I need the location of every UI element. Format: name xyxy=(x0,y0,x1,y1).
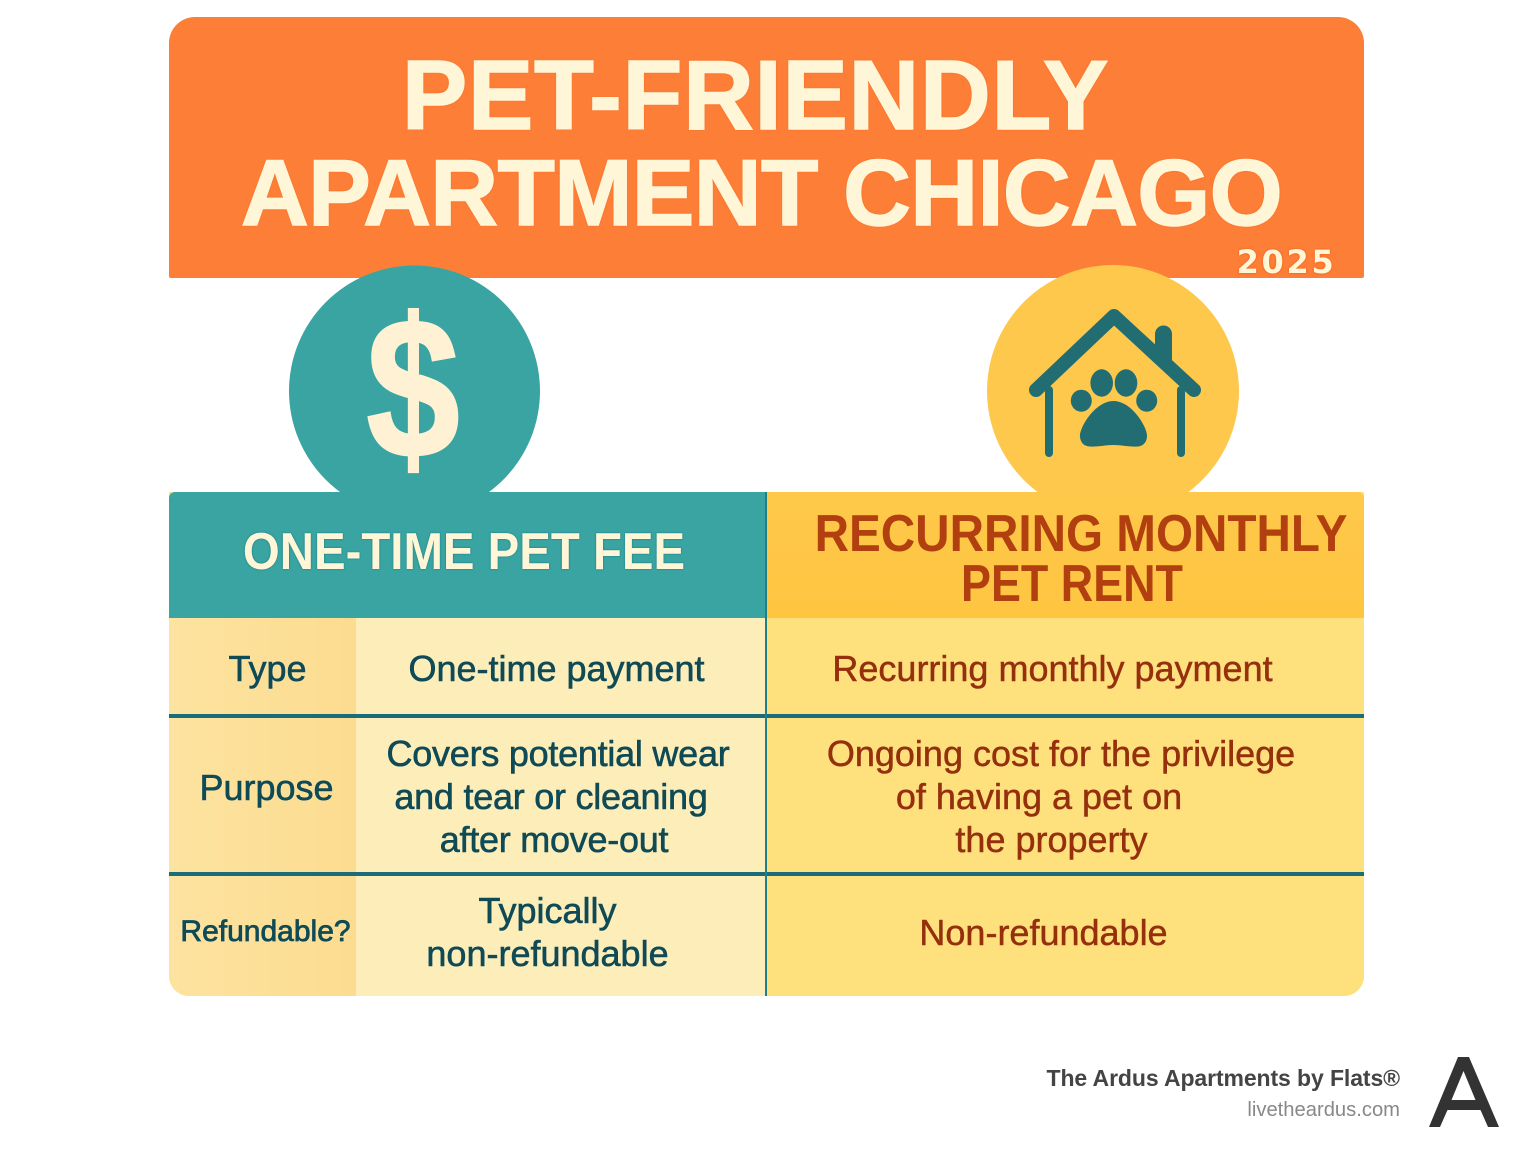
icon: dollar coin: $ xyxy=(366,277,460,499)
right header: recurring monthly pet rent xyxy=(767,492,1364,618)
purpose: one-time xyxy=(387,733,730,860)
label column xyxy=(169,618,356,996)
one-time value column xyxy=(356,618,766,996)
year label: 2025 xyxy=(1237,243,1336,281)
type: one-time: One-time payment xyxy=(408,648,705,689)
row label: type: Type xyxy=(228,648,307,689)
brand logo xyxy=(1429,1057,1499,1127)
row label: refundable: Refundable? xyxy=(180,915,351,948)
brand name: The Ardus Apartments by Flats® xyxy=(1047,1065,1400,1091)
purpose: one-time: and tear or cleaning xyxy=(394,776,708,817)
left header: one-time pet fee xyxy=(169,492,766,618)
comparison table xyxy=(169,492,1364,996)
recurring value column xyxy=(767,618,1364,996)
refundable: one-time: non-refundable xyxy=(426,933,669,974)
brand url: livetheardus.com xyxy=(1247,1099,1400,1121)
icon: house with paw xyxy=(987,265,1239,492)
right header line 2: PET RENT xyxy=(961,555,1183,613)
type: recurring: Recurring monthly payment xyxy=(832,648,1273,689)
icon: dollar coin xyxy=(289,266,540,499)
brand text xyxy=(1046,1065,1400,1121)
row label: purpose: Purpose xyxy=(199,767,334,808)
title line 1: PET-FRIENDLY xyxy=(402,40,1109,150)
refundable: one-time xyxy=(426,890,669,974)
title line 2: APARTMENT CHICAGO xyxy=(241,140,1282,245)
refundable: one-time: Typically xyxy=(478,890,617,931)
purpose: recurring: the property xyxy=(955,819,1148,860)
table grid lines xyxy=(169,714,1364,718)
right header line 1: RECURRING MONTHLY xyxy=(815,505,1347,563)
purpose: recurring: of having a pet on xyxy=(896,776,1182,817)
purpose: one-time: Covers potential wear xyxy=(387,733,729,774)
title banner xyxy=(169,17,1364,278)
left header text: ONE-TIME PET FEE xyxy=(243,523,685,581)
purpose: one-time: after move-out xyxy=(440,819,668,860)
purpose: recurring: Ongoing cost for the privilege xyxy=(827,733,1295,774)
purpose: recurring xyxy=(827,733,1295,860)
refundable: recurring: Non-refundable xyxy=(919,912,1168,953)
